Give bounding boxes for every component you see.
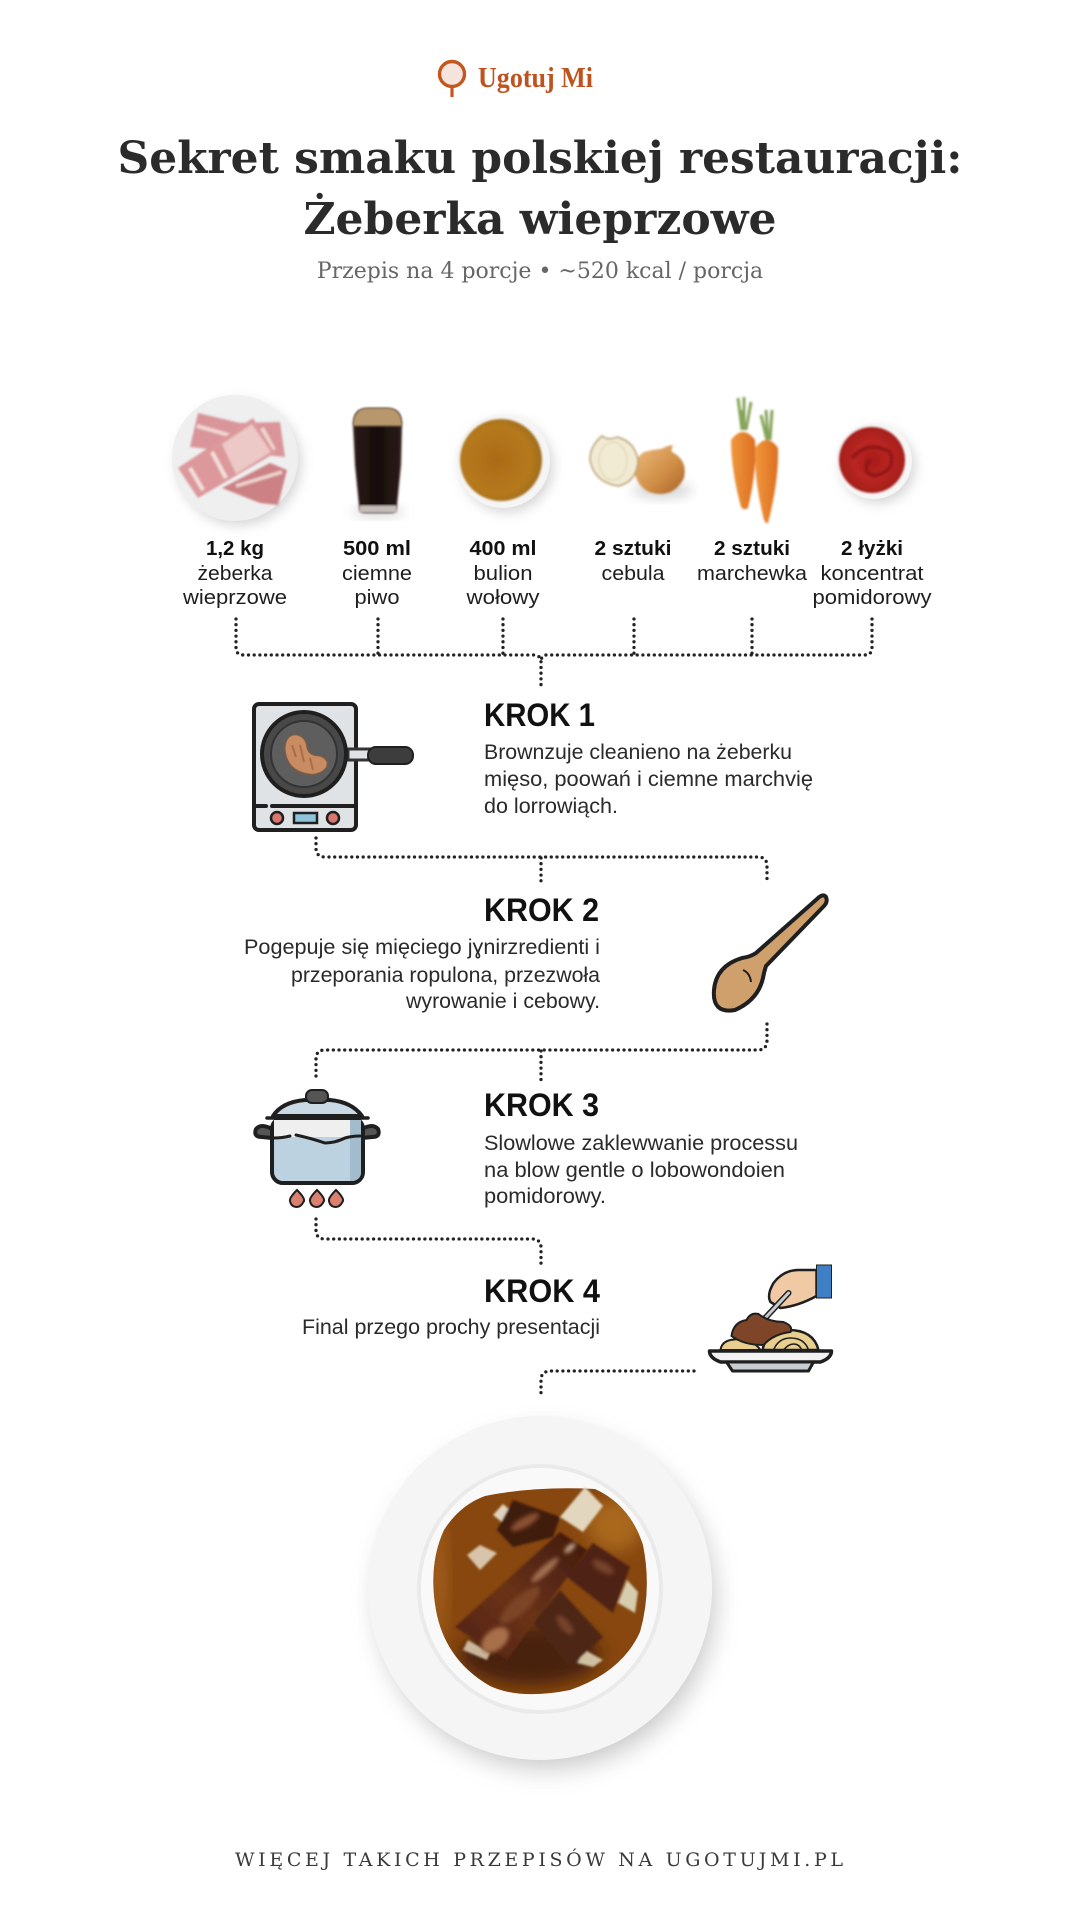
ingredient: tomato paste (836, 423, 915, 503)
glazed ribs (455, 1487, 638, 1667)
connector: step 4 to plate (541, 1371, 694, 1397)
final plate with glazed ribs (368, 1416, 714, 1768)
label: carrot (697, 538, 808, 585)
step 1 text: Brownzuje cleanieno na żeberku (484, 741, 792, 764)
connector: step 2 to step 3 (316, 1024, 767, 1080)
icon: boiling pot (255, 1090, 379, 1207)
ingredient: carrots (731, 397, 778, 523)
step 2 text (244, 892, 600, 1013)
label: carrot: marchewka (697, 563, 808, 585)
ingredient row (172, 395, 915, 525)
label: broth: wołowy (465, 587, 540, 609)
rib highlights (476, 1510, 616, 1658)
label: beer: ciemne (342, 563, 412, 585)
label: ribs: 1,2 kg (206, 538, 264, 560)
footer: WIĘCEJ TAKICH PRZEPISÓW NA UGOTUJMI.PL (235, 1848, 843, 1871)
title: Żeberka wieprzowe (303, 191, 777, 245)
step 1 text (484, 697, 813, 818)
label: tomato paste: 2 łyżki (841, 538, 903, 560)
label: beer: piwo (354, 587, 400, 609)
label: ribs (182, 538, 287, 609)
label: tomato paste: koncentrat (820, 563, 924, 585)
step 3 text: Slowlowe zaklewwanie processu (484, 1132, 798, 1155)
label: onion: cebula (602, 563, 665, 585)
ingredient labels (182, 538, 932, 609)
label: ribs: wieprzowe (182, 587, 287, 609)
plate (368, 1416, 714, 1768)
step 1 (254, 697, 813, 830)
subtitle: Przepis na 4 porcje • ~520 kcal / porcja (317, 259, 763, 284)
step 1 text: do lorrowiąch. (484, 795, 618, 818)
step 4 text: Final przego prochy presentacji (302, 1316, 600, 1339)
step 3 text (484, 1087, 798, 1208)
step 2 text: przeporania ropulona, przezwoła (291, 964, 600, 987)
label: onion (594, 538, 672, 585)
title (118, 133, 962, 245)
ingredient: dark beer (352, 408, 404, 517)
title: Sekret smaku polskiej restauracji: (118, 133, 962, 184)
step 1 text: KROK 1 (484, 697, 595, 733)
label: onion: 2 sztuki (594, 538, 672, 560)
sauce (433, 1488, 647, 1694)
connector: step 1 to step 2 (316, 838, 767, 883)
step 2 (244, 892, 827, 1013)
connector: ingredients to step 1 (236, 619, 872, 688)
ingredient: onions (590, 436, 692, 498)
label: broth (465, 538, 540, 609)
icon: plating dish (710, 1265, 832, 1371)
label: tomato paste: pomidorowy (812, 587, 932, 609)
step 3 text: na blow gentle o lobowondoien (484, 1159, 785, 1182)
label: broth: bulion (474, 563, 532, 585)
logo: Ugotuj Mi (440, 62, 593, 97)
label: tomato paste (812, 538, 932, 609)
step 4 text: KROK 4 (484, 1273, 600, 1309)
label: beer: 500 ml (343, 538, 411, 560)
step 3 text: pomidorowy. (484, 1185, 606, 1208)
step 2 text: wyrowanie i cebowy. (405, 990, 600, 1013)
ingredient: ribs (172, 395, 301, 525)
icon: logo spoon (440, 62, 464, 97)
label: carrot: 2 sztuki (714, 538, 790, 560)
icon: pan on cooktop (254, 704, 413, 830)
step 3 text: KROK 3 (484, 1087, 599, 1123)
step 3 (255, 1087, 798, 1208)
step 2 text: Pogepuje się mięciego jɣnirzredienti i (244, 936, 600, 959)
step 1 text: mięso, poowań i ciemne marchvię (484, 768, 813, 791)
connector: step 3 to step 4 (316, 1219, 541, 1265)
step 4 (302, 1265, 832, 1371)
label: broth: 400 ml (470, 538, 536, 560)
step 2 text: KROK 2 (484, 892, 599, 928)
brand name: Ugotuj Mi (478, 63, 593, 94)
label: ribs: żeberka (198, 563, 273, 585)
icon: wooden spoon (714, 895, 827, 1011)
ingredient: beef broth (456, 414, 553, 512)
step 4 text (302, 1273, 600, 1339)
label: beer (342, 538, 412, 609)
